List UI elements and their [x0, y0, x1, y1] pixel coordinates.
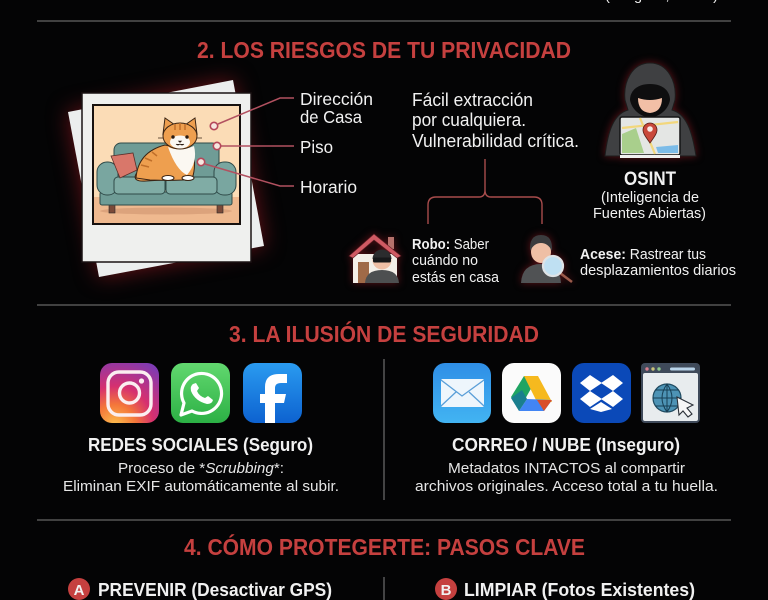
icon: burglar at house — [349, 234, 401, 283]
text: OSINT: OSINT — [624, 169, 676, 190]
text block: vulnerability: Fácil extracción — [412, 90, 533, 110]
step B: clean: B — [441, 582, 452, 599]
text: Robo: Robo: Saber — [412, 237, 489, 253]
text: Robo — [412, 237, 500, 286]
icon: person with magnifier — [521, 235, 572, 283]
text: social networks: Proceso de *Scrubbing*: — [118, 460, 284, 477]
text: mail and cloud: archivos originales. Acceso total a tu huella. — [415, 478, 718, 495]
back photo sheet — [68, 80, 264, 277]
text: mail and cloud: Metadatos INTACTOS al compartir — [448, 460, 685, 477]
heading: section 3: 3. LA ILUSIÓN DE SEGURIDAD — [229, 320, 539, 347]
icon: Facebook — [243, 363, 302, 423]
text: OSINT: Fuentes Abiertas) — [593, 206, 706, 222]
text: mail and cloud: CORREO / NUBE (Inseguro) — [452, 435, 680, 455]
step A: prevent: PREVENIR (Desactivar GPS) — [98, 580, 332, 600]
step A: prevent: A — [74, 582, 85, 599]
bracket connector — [428, 159, 542, 224]
icon: WhatsApp — [171, 363, 230, 423]
text: Acese — [580, 247, 736, 279]
labels: metadata: Dirección — [300, 89, 373, 109]
icon: Dropbox — [572, 363, 631, 423]
icon: web browser — [641, 363, 700, 423]
text: OSINT — [593, 169, 706, 222]
text: OSINT: (Inteligencia de — [601, 190, 699, 206]
text: Acese: Acese: Rastrear tus — [580, 247, 706, 263]
text block: vulnerability — [412, 90, 579, 151]
cat — [135, 118, 197, 181]
text: social networks: Eliminan EXIF automáticamente al subir. — [63, 478, 339, 495]
text: Robo: estás en casa — [412, 270, 500, 286]
text: Acese: desplazamientos diarios — [580, 263, 736, 279]
labels: metadata: de Casa — [300, 107, 362, 127]
text: social networks — [63, 435, 339, 495]
icon: Google Drive — [502, 363, 561, 423]
labels: metadata — [300, 89, 373, 197]
step B: clean: LIMPIAR (Fotos Existentes) — [464, 580, 695, 600]
labels: metadata: Horario — [300, 177, 357, 197]
labels: metadata: Piso — [300, 137, 333, 157]
icon: hooded hacker with map laptop — [605, 63, 696, 158]
panel: photo stack with cat — [68, 80, 264, 277]
heading: section 2: 2. LOS RIESGOS DE TU PRIVACIDAD — [197, 37, 571, 63]
heading: section 4: 4. CÓMO PROTEGERTE: PASOS CLAVE — [184, 533, 585, 560]
photo: cat on sofa — [93, 105, 240, 224]
icon: Instagram — [100, 363, 159, 423]
text block: vulnerability: por cualquiera. — [412, 110, 526, 130]
icon: mail — [433, 363, 491, 423]
text: Robo: cuándo no — [412, 253, 478, 269]
front polaroid — [82, 93, 251, 262]
callout lines: metadata on photo — [197, 98, 294, 186]
text block: vulnerability: Vulnerabilidad crítica. — [412, 131, 579, 151]
text: mail and cloud — [415, 435, 718, 495]
text: social networks: REDES SOCIALES (Seguro) — [88, 435, 313, 455]
